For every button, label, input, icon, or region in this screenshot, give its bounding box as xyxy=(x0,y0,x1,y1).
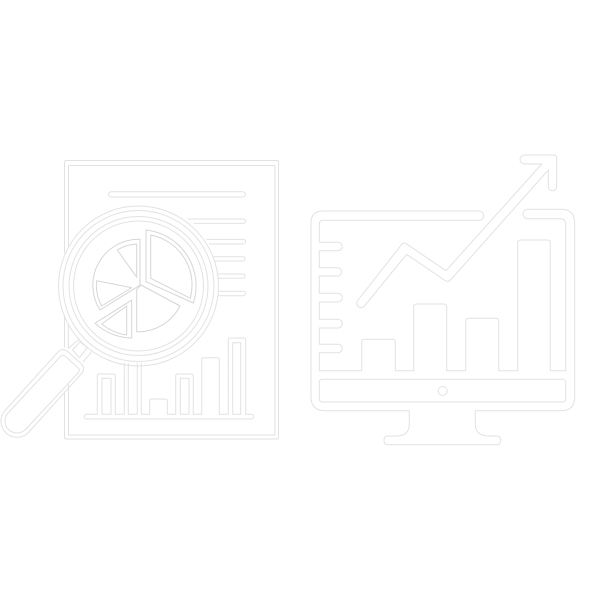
pie slice: left group xyxy=(93,239,140,310)
monitor power button xyxy=(438,386,447,396)
pie chart xyxy=(93,230,196,338)
icon: monitor with growth chart xyxy=(311,155,575,445)
monitor outer frame and stand xyxy=(311,209,575,445)
pie slice: bottom right xyxy=(137,285,180,332)
magnifier handle xyxy=(1,350,84,437)
icon: report document with magnifier xyxy=(1,160,278,439)
magnifier lens rings xyxy=(58,206,218,366)
document sheet outline xyxy=(64,160,278,439)
pie slice: bottom left xyxy=(95,300,132,338)
pie slice: large top right xyxy=(146,230,196,303)
growth arrow xyxy=(357,155,557,308)
magnifier neck xyxy=(68,325,92,362)
document bar chart xyxy=(84,338,254,419)
monitor base panel xyxy=(319,379,566,402)
document text lines xyxy=(188,219,246,296)
document heading line xyxy=(108,192,246,197)
